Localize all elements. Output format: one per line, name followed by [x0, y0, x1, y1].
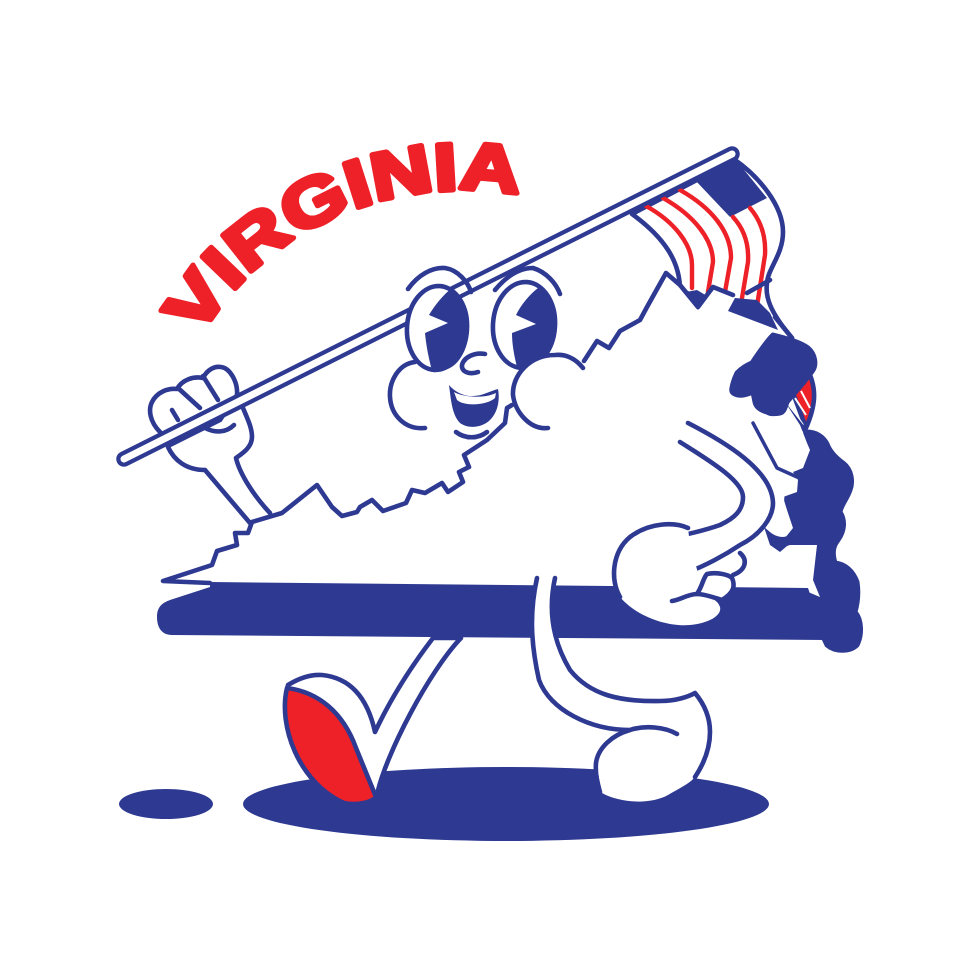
map of Virginia body	[163, 273, 820, 597]
dark triangle at the notch	[686, 290, 707, 310]
left eyebrow	[408, 268, 471, 292]
American flag	[632, 160, 792, 338]
left eye	[404, 284, 470, 372]
horizontal blue base bar	[157, 582, 826, 640]
back leg and shoe	[285, 638, 461, 804]
dark wedge near the arm	[764, 527, 790, 552]
lower lip	[456, 432, 487, 437]
ground shadow: large ellipse	[243, 767, 769, 841]
back contour line	[753, 423, 797, 477]
right eye	[490, 280, 558, 370]
right hand	[614, 524, 745, 625]
river line	[775, 317, 792, 338]
teeth	[454, 392, 496, 404]
finger	[733, 553, 745, 575]
right eyebrow	[495, 268, 560, 294]
left cheek	[390, 362, 460, 428]
shoe sole	[285, 688, 376, 804]
left fist	[150, 367, 237, 445]
thumb	[697, 573, 734, 600]
flag lower fold	[787, 375, 814, 432]
flagpole	[124, 154, 732, 459]
face	[390, 268, 590, 437]
right cheek	[513, 355, 590, 428]
dark patch middle	[732, 335, 815, 414]
title: VIRGINIA: VIRGINIA	[158, 142, 520, 322]
front leg and shoe	[532, 578, 710, 802]
right arm	[663, 423, 773, 572]
nose	[462, 354, 485, 373]
left arm	[168, 408, 270, 523]
east coast blue landmass	[780, 432, 861, 650]
ground shadow: small ellipse	[119, 789, 213, 819]
dark patch upper	[728, 298, 778, 330]
mouth	[449, 385, 499, 427]
